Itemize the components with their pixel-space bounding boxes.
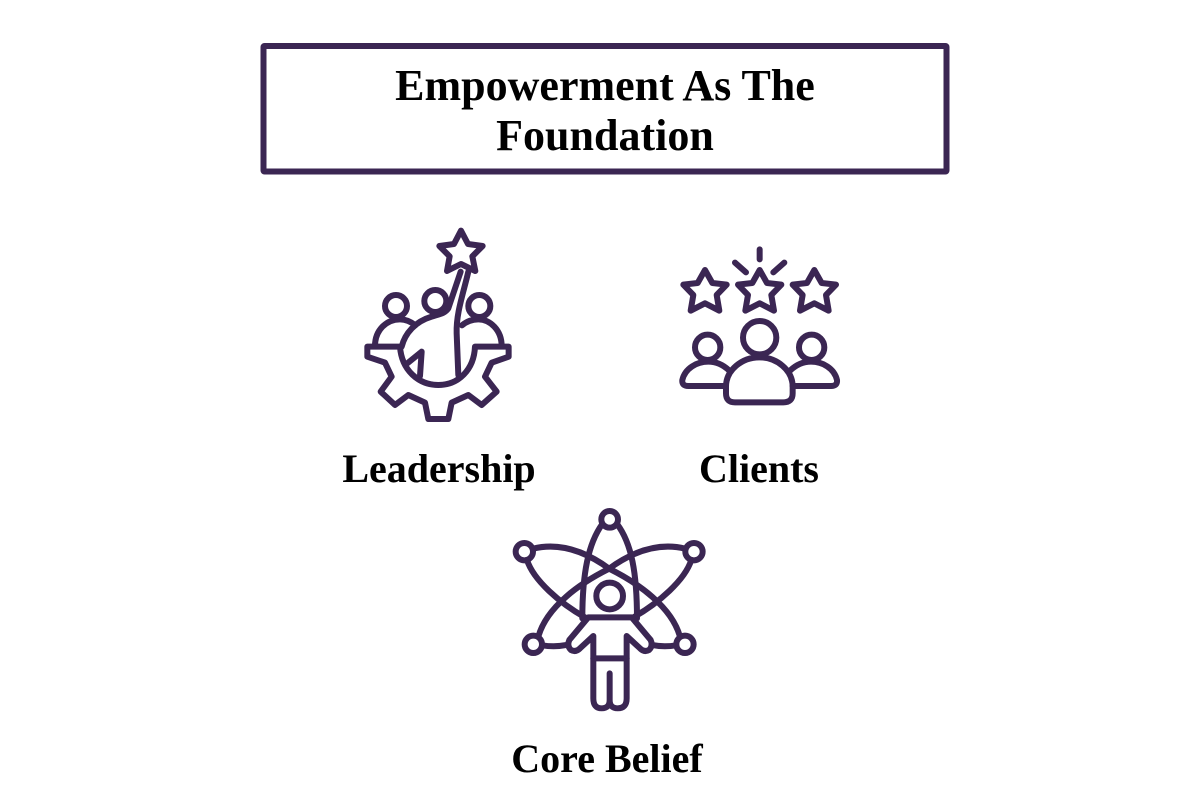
title: Foundation xyxy=(496,111,714,160)
label: Clients: Clients xyxy=(699,446,819,491)
icon: core belief person in atom rocket xyxy=(516,511,703,708)
label: Core Belief: Core Belief xyxy=(511,736,703,781)
title box xyxy=(264,46,946,172)
icon: leadership gear with people and star xyxy=(367,231,509,419)
icon: clients with three stars xyxy=(682,249,837,402)
label: Leadership: Leadership xyxy=(342,446,536,491)
title: Empowerment As The xyxy=(395,61,815,110)
